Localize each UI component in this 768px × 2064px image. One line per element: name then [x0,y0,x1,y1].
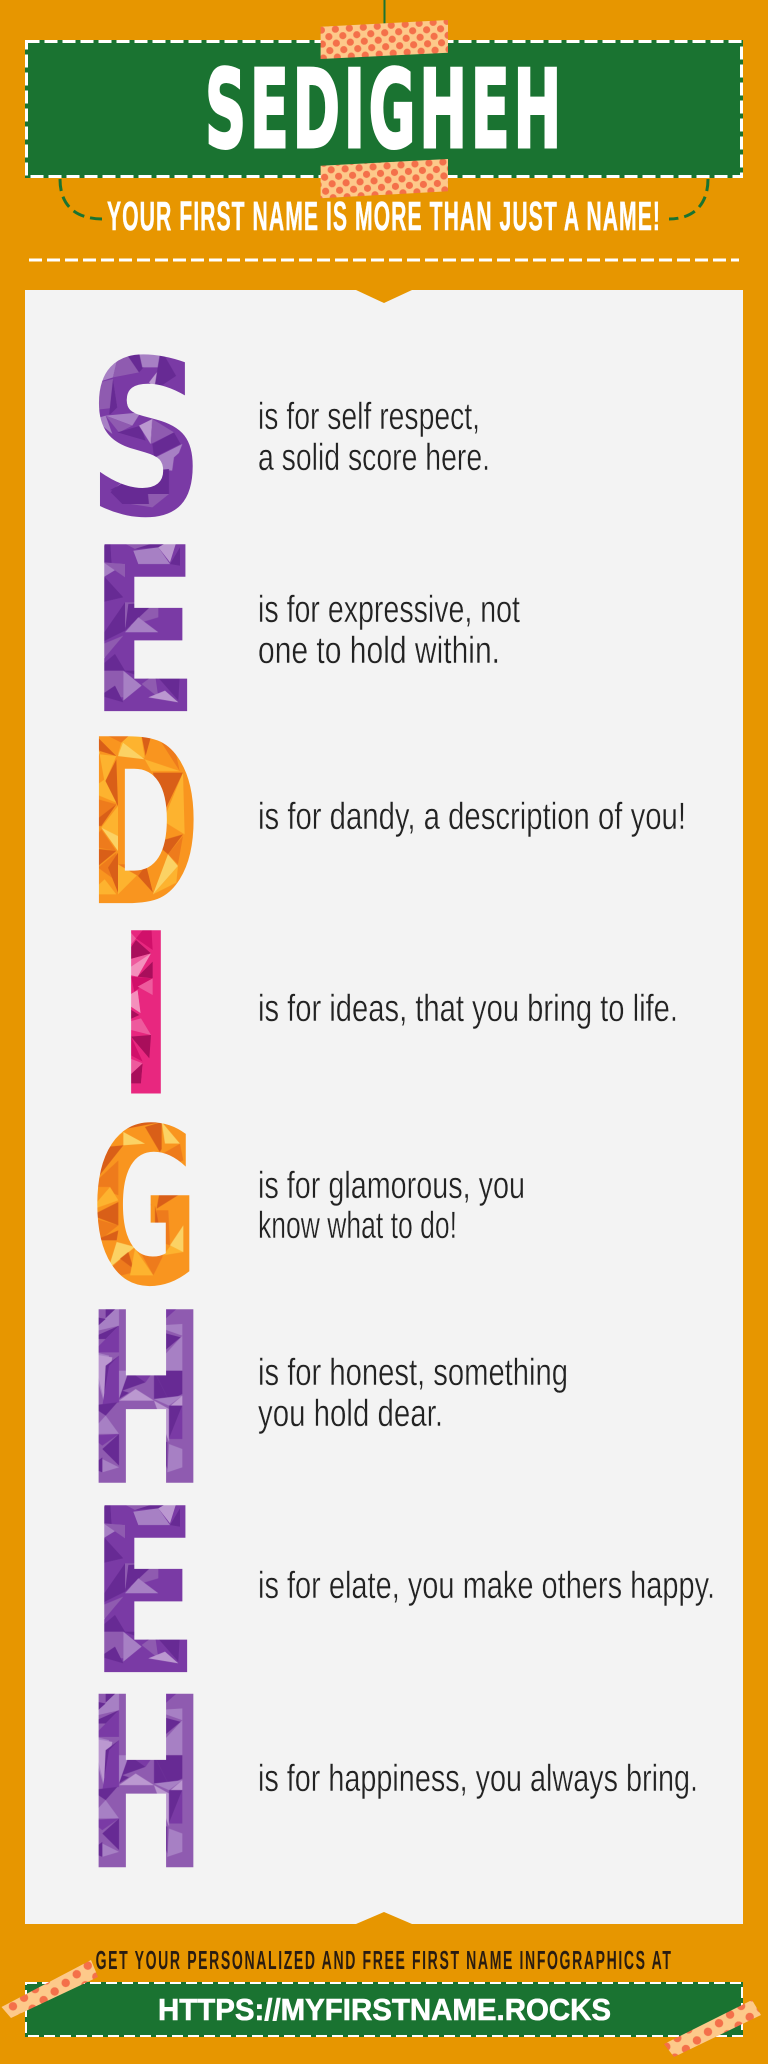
text: S: a solid score here. [258,437,490,479]
text: E [258,589,520,672]
text: E: one to hold within. [258,630,500,672]
header banner [25,40,743,178]
letter H second: H [85,1647,207,1924]
text: S [258,396,490,479]
letter S: S [87,316,205,566]
text: H: you hold dear. [258,1393,443,1435]
hanging thread [384,0,386,24]
tape: top [321,20,448,59]
dashed divider [29,258,739,262]
letter D: D [86,691,201,958]
letter E: E [90,499,199,766]
footer banner [25,1982,743,2037]
text: G: know what to do! [258,1205,457,1247]
tape: footer right [664,2000,761,2057]
text: E: is for expressive, not [258,589,520,631]
letter I: I [117,886,175,1147]
connector: left [60,179,103,219]
text: G [258,1165,525,1247]
text: H: is for honest, something [258,1352,568,1394]
connector: right [669,179,708,219]
letter H: H [85,1263,207,1540]
text: H [258,1352,568,1435]
footer url: HTTPS://MYFIRSTNAME.ROCKS [158,1993,611,2027]
letter E second: E [90,1460,199,1727]
text: S: is for self respect, [258,396,480,438]
text: G: is for glamorous, you [258,1165,525,1207]
tape: bottom [321,159,448,198]
panel: letters [25,290,743,1924]
tape: footer left [2,1960,98,2018]
letter G: G [91,1083,199,1335]
